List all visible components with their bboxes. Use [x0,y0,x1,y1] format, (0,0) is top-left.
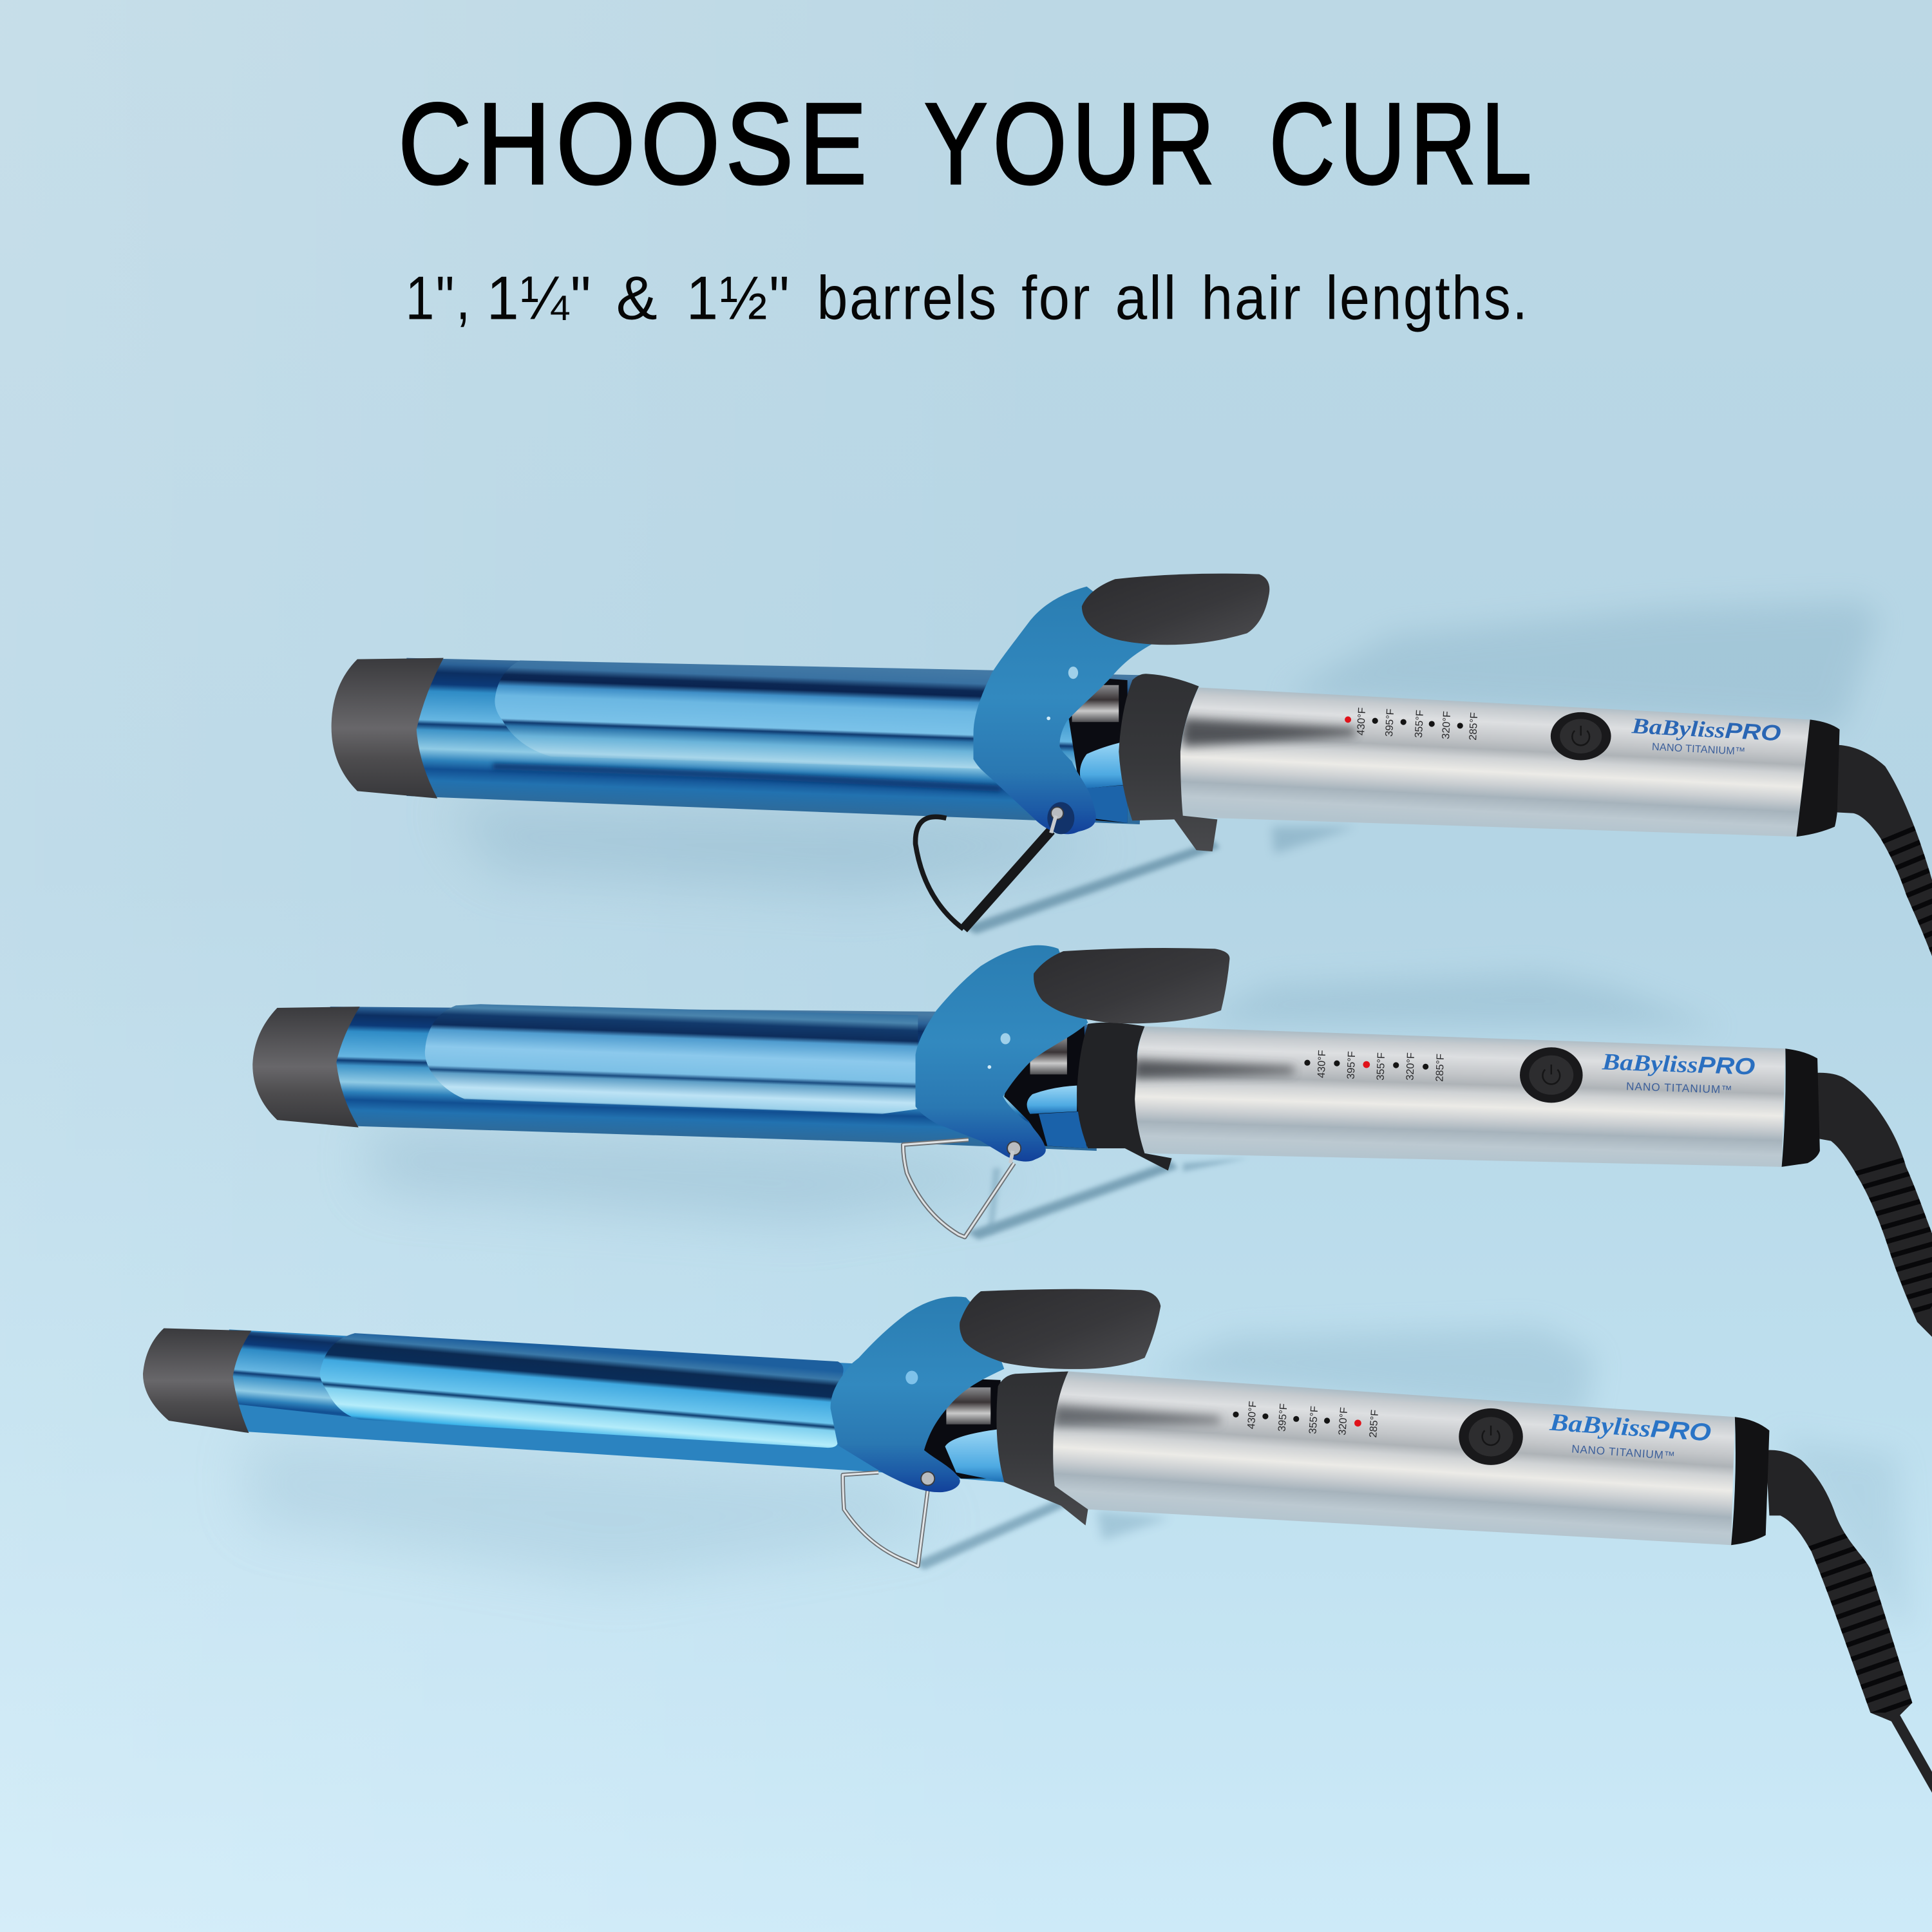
brand logo: NANO TITANIUM™ [1626,1079,1732,1096]
subtitle: lengths. [1326,264,1529,333]
subtitle: for [1021,264,1092,333]
temperature scale: 395°F [1383,708,1396,737]
rubber thumb rest [1034,948,1229,1023]
title: CHOOSE [398,79,873,209]
silver wire stand [903,1140,1014,1237]
brand logo [1547,1408,1712,1464]
cast shadows [444,601,1879,934]
temperature scale: 395°F [1276,1403,1290,1432]
title: CURL [1269,79,1537,209]
brand logo: BaByliss PRO [1601,1048,1756,1080]
temperature scale: 320°F [1336,1406,1350,1435]
power cord [1766,1450,1932,1793]
temperature scale: 355°F [1413,710,1426,738]
curling iron: top, 1½ inch [332,574,1932,956]
subtitle [405,264,1529,333]
brand logo [1630,714,1782,759]
title [398,79,1537,209]
subtitle: & [616,264,659,333]
brand logo: BaByliss PRO [1548,1408,1712,1447]
subtitle: 1½" [687,264,791,333]
lever pivot screw [1047,802,1074,834]
power cord [1811,1073,1932,1337]
subtitle: all [1115,264,1178,333]
cast shadows [247,1327,1910,1639]
handle dark reflection [1133,1059,1294,1078]
handle end cap [1797,719,1840,837]
spring clamp [320,1333,844,1448]
brand logo: NANO TITANIUM™ [1651,741,1746,757]
temperature scale: 355°F [1375,1052,1387,1081]
barrel tip highlight [229,1331,357,1417]
temperature scale [1345,707,1480,741]
lever pivot screw [921,1472,934,1485]
power button [1551,712,1611,760]
curling iron: middle, 1¼ inch [252,945,1932,1337]
silver handle [1053,1371,1735,1545]
rubber collar [1119,674,1217,851]
rubber collar [1077,1023,1172,1171]
temperature scale: 320°F [1405,1052,1417,1081]
lever pivot screw [1007,1142,1021,1163]
temperature scale: 285°F [1467,712,1480,741]
blue barrel [229,1329,1004,1482]
barrel reflection streak [493,766,1001,788]
temperature scale: 285°F [1434,1054,1446,1082]
brand logo: NANO TITANIUM™ [1571,1442,1675,1462]
blue clamp lever [916,945,1088,1162]
silver wire stand [843,1472,928,1566]
temperature scale: 320°F [1440,711,1453,739]
temperature scale: 395°F [1345,1051,1358,1079]
spring clamp [495,661,996,769]
temperature scale: 430°F [1316,1050,1328,1078]
temperature scale: 430°F [1355,707,1368,735]
subtitle: barrels [817,264,998,333]
blue clamp lever [973,587,1158,834]
curling iron: bottom, 1 inch [143,1289,1932,1793]
power cord [1830,745,1932,956]
clamp hinge mechanism [924,1378,1004,1482]
silver handle [1178,688,1810,837]
temperature scale: 285°F [1367,1409,1381,1438]
temperature scale [1233,1401,1381,1438]
handle end cap [1731,1417,1769,1545]
temperature scale [1304,1050,1446,1082]
blue barrel [406,658,1146,824]
subtitle: 1", [405,264,472,333]
brand logo [1600,1048,1756,1097]
title: YOUR [924,79,1220,209]
silver handle [1135,1027,1785,1167]
rubber thumb rest [1082,574,1269,645]
subtitle: 1¼" [487,264,592,333]
temperature scale: 430°F [1245,1401,1259,1430]
brand logo: BaByliss PRO [1631,714,1782,746]
temperature scale: 355°F [1307,1406,1320,1434]
rubber collar [996,1371,1088,1526]
spring clamp [425,1004,918,1114]
rubber thumb rest [960,1289,1160,1369]
black wire stand [915,817,1051,929]
handle end cap [1782,1048,1820,1167]
blue barrel [330,1007,1097,1151]
power button [1520,1047,1583,1103]
clamp hinge mechanism [1004,1025,1087,1148]
clamp hinge mechanism [1062,675,1128,823]
blue clamp lever [831,1296,1004,1492]
cast shadows [370,973,1725,1240]
handle dark reflection [1183,718,1356,746]
barrel tip cap [252,1007,360,1128]
handle dark reflection [1054,1405,1220,1426]
barrel tip cap [332,658,444,799]
barrel tip cap [143,1328,251,1433]
subtitle: hair [1201,264,1302,333]
power button [1459,1408,1523,1465]
